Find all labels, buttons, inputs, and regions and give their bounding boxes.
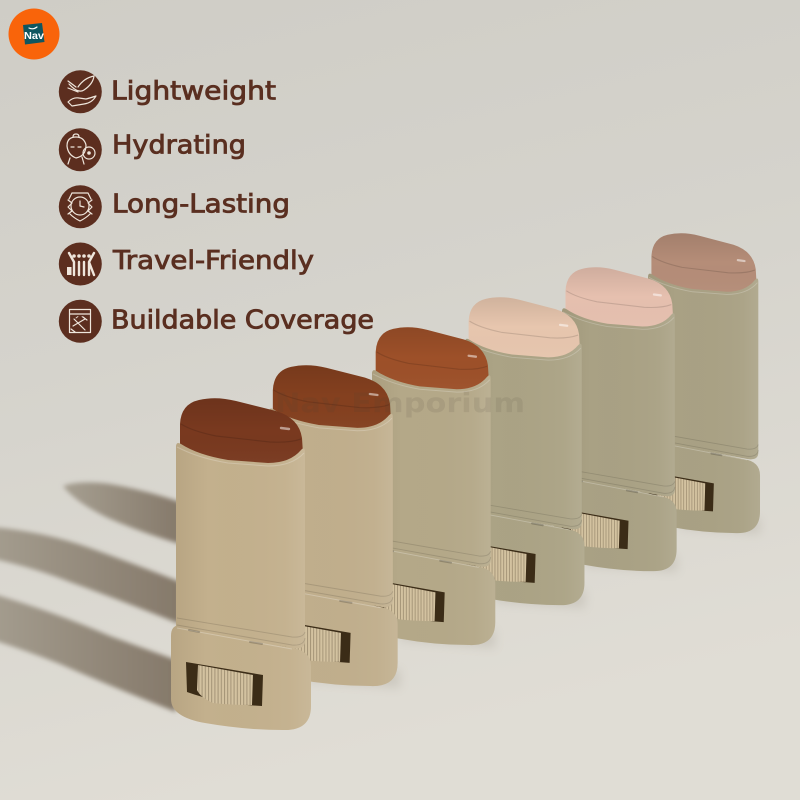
feature: Lightweight [59, 70, 276, 113]
icon: face with droplet [59, 128, 102, 171]
logo: Nav [24, 30, 44, 42]
cast shadows [0, 482, 180, 712]
label: Long-Lasting: Long-Lasting [112, 190, 290, 220]
label: Lightweight: Lightweight [111, 76, 276, 106]
icon: browser window with tools [59, 300, 102, 343]
feature: Hydrating [59, 128, 246, 171]
watermark: Nav Emporium [275, 388, 525, 419]
floor contact shadows [300, 512, 760, 688]
icon: clock shield [59, 185, 102, 228]
stick 4: pale peach shade [458, 297, 584, 605]
stick 5: light pink shade [554, 267, 677, 571]
stick 1: deep brown shade [171, 398, 311, 730]
stick 3: caramel shade [366, 327, 495, 645]
label: Hydrating: Hydrating [112, 130, 246, 160]
stick 6: rose brown shade [640, 233, 760, 533]
label: Travel-Friendly: Travel-Friendly [112, 246, 314, 276]
label: Buildable Coverage: Buildable Coverage [111, 306, 374, 336]
icon: group of travellers [59, 242, 102, 286]
icon: feather over hand [59, 70, 102, 113]
logo [8, 8, 60, 60]
stick 2: chestnut shade [263, 365, 398, 686]
feature: Long-Lasting [59, 185, 290, 228]
feature: Buildable Coverage [59, 300, 374, 343]
feature: Travel-Friendly [59, 242, 314, 286]
